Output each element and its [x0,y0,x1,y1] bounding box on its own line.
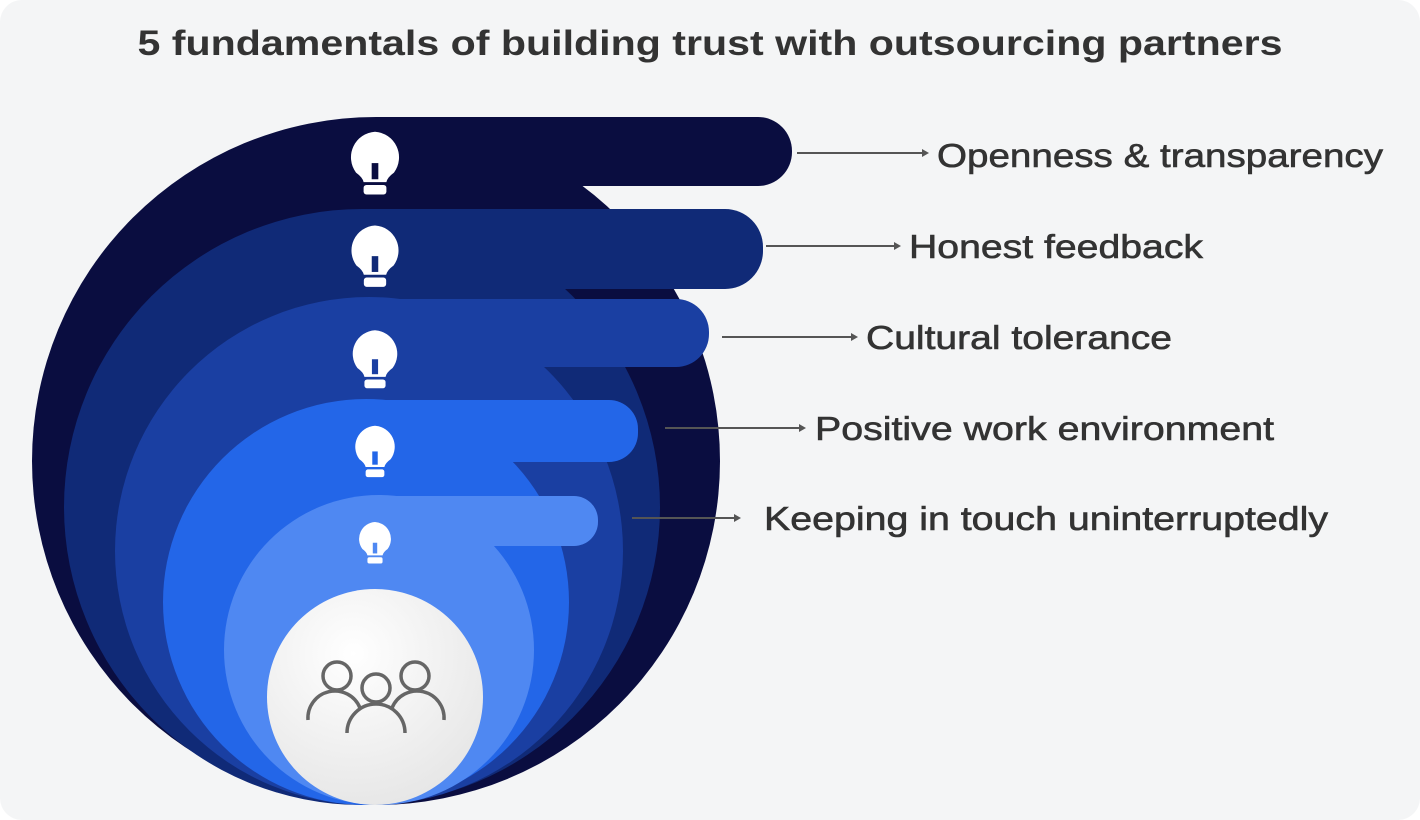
arrow 2 [766,242,901,250]
arrow 3 [722,333,858,341]
layer 1: openness [32,117,792,805]
icon: bulb 3 [353,330,397,388]
arrow 1 [797,149,929,157]
label 4: Positive work environment [815,410,1274,447]
layer 3: cultural tolerance [115,297,709,805]
icon: bulb 4 [355,426,395,477]
arrow 5 [632,514,741,522]
layer 2: honest feedback [64,209,763,805]
label 3: Cultural tolerance [866,319,1172,356]
icon: bulb 2 [351,225,399,287]
center circle with people icon [267,589,483,805]
label 1: Openness & transparency [937,137,1384,174]
icon: bulb 5 [359,522,391,564]
title: 5 fundamentals of building trust with outsourcing partners [138,24,1282,63]
label 5: Keeping in touch uninterruptedly [764,500,1329,537]
layer 5: keeping in touch [224,495,598,805]
icon: people [308,662,444,733]
layer 4: positive work environment [163,399,638,805]
label 2: Honest feedback [909,228,1204,265]
arrow 4 [665,424,806,432]
icon: bulb 1 [351,132,399,194]
